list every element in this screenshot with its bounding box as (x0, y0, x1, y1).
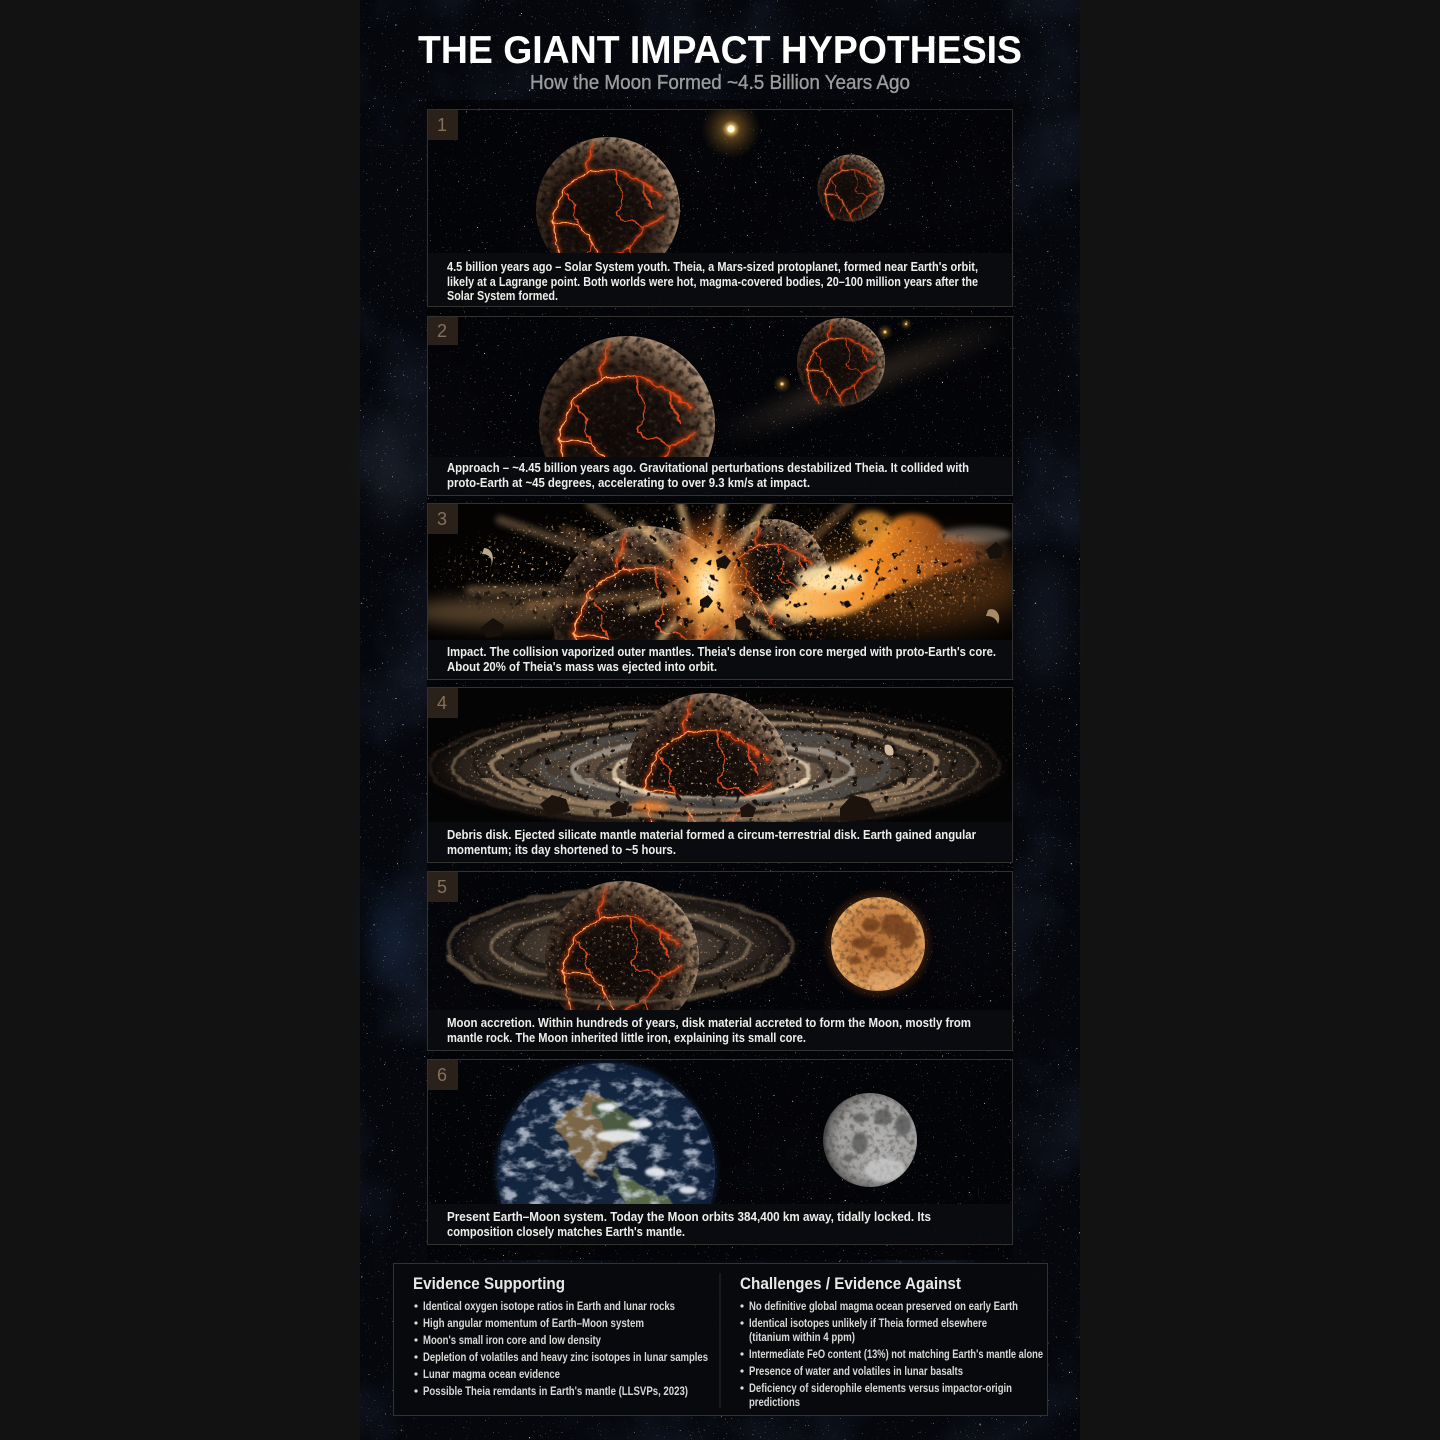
icon: Moon (823, 1093, 917, 1187)
panel: step 4 Debris disk (420, 686, 1020, 862)
column: challenges: predictions (749, 1397, 800, 1409)
column: evidence supporting: Evidence Supporting (413, 1274, 565, 1293)
step number 5: 5 (437, 877, 447, 897)
panel: step 1 Solar System youth (428, 99, 1012, 306)
scene: two protoplanets and distant star (536, 110, 884, 253)
caption (428, 253, 1012, 306)
caption: Solar System formed. (447, 289, 558, 303)
column: challenges: Intermediate FeO content (13%) not matching Earth's mantle alone (749, 1349, 1043, 1361)
step number 4 (428, 688, 458, 718)
step number 3: 3 (437, 509, 447, 529)
column: evidence supporting (413, 1274, 708, 1398)
caption: likely at a Lagrange point. Both worlds were hot, magma-covered bodies, 20–100 million years after the (447, 275, 978, 289)
step number 1: 1 (437, 115, 447, 135)
step number 3 (428, 504, 458, 534)
column: challenges: Deficiency of siderophile elements versus impactor-origin (749, 1383, 1012, 1395)
step number 1 (428, 110, 458, 140)
column: evidence supporting: Identical oxygen isotope ratios in Earth and lunar rocks (423, 1301, 675, 1313)
caption (428, 640, 1012, 679)
caption: Moon accretion. Within hundreds of years, disk material accreted to form the Moon, mostly from (447, 1016, 971, 1030)
column: evidence supporting: High angular momentum of Earth–Moon system (423, 1318, 644, 1330)
column: challenges: Challenges / Evidence Against (740, 1274, 961, 1293)
caption (428, 1010, 1012, 1050)
column: challenges: Presence of water and volatiles in lunar basalts (749, 1366, 963, 1378)
subtitle: How the Moon Formed ~4.5 Billion Years Ago (530, 72, 910, 94)
caption: 4.5 billion years ago – Solar System youth. Theia, a Mars-sized protoplanet, formed near Earth's orbit, (447, 260, 978, 274)
caption: Impact. The collision vaporized outer mantles. Theia's dense iron core merged with proto-Earth's core. (447, 645, 996, 659)
step number 6 (428, 1060, 458, 1090)
column: challenges: Identical isotopes unlikely if Theia formed elsewhere (749, 1318, 987, 1330)
panel: step 6 Present Earth–Moon system (427, 1059, 1013, 1245)
step number 5 (428, 872, 458, 902)
step number 4: 4 (437, 693, 447, 713)
caption: proto-Earth at ~45 degrees, accelerating to over 9.3 km/s at impact. (447, 476, 810, 490)
step number 6: 6 (437, 1065, 447, 1085)
step number 2 (428, 317, 458, 345)
panel: step 2 Approach (428, 316, 1012, 512)
column: challenges: No definitive global magma ocean preserved on early Earth (749, 1301, 1018, 1313)
title: THE GIANT IMPACT HYPOTHESIS (418, 29, 1022, 72)
scene: Earth and Moon today (493, 1060, 917, 1204)
caption (428, 822, 1012, 862)
scene: Theia approaching proto-Earth (539, 318, 991, 457)
scene: Earth with rings and molten Moon (440, 881, 932, 1010)
caption: Approach – ~4.45 billion years ago. Gravitational perturbations destabilized Theia. It collided with (447, 461, 969, 475)
column: challenges: (titanium within 4 ppm) (749, 1332, 855, 1344)
panel: step 5 Moon accretion (428, 872, 1012, 1050)
column: challenges (740, 1274, 1043, 1409)
caption (428, 457, 1012, 495)
panel: step 3 Impact (427, 503, 1013, 680)
caption: Present Earth–Moon system. Today the Moon orbits 384,400 km away, tidally locked. Its (447, 1210, 931, 1224)
column: evidence supporting: Moon's small iron core and low density (423, 1335, 601, 1347)
scene: debris disk around Earth (428, 691, 1012, 822)
scene: collision and explosion (428, 504, 1012, 640)
caption (428, 1204, 1012, 1244)
column: evidence supporting: Possible Theia remdants in Earth's mantle (LLSVPs, 2023) (423, 1386, 688, 1398)
panel: evidence for and against (394, 1264, 1048, 1416)
caption: composition closely matches Earth's mantle. (447, 1225, 685, 1239)
caption: About 20% of Theia's mass was ejected into orbit. (447, 660, 717, 674)
caption: momentum; its day shortened to ~5 hours. (447, 843, 676, 857)
column: evidence supporting: Depletion of volatiles and heavy zinc isotopes in lunar samples (423, 1352, 708, 1364)
column: evidence supporting: Lunar magma ocean evidence (423, 1369, 560, 1381)
caption: Debris disk. Ejected silicate mantle material formed a circum-terrestrial disk. Earth gained angular (447, 828, 976, 842)
icon: molten young Moon (822, 888, 934, 1000)
icon: Earth (493, 1060, 719, 1204)
caption: mantle rock. The Moon inherited little iron, explaining its small core. (447, 1031, 806, 1045)
step number 2: 2 (437, 321, 447, 341)
